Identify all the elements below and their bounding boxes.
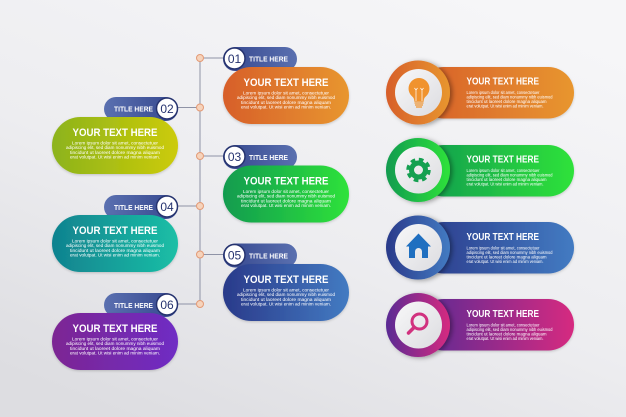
badge inner disc (395, 224, 442, 271)
bar (418, 67, 574, 118)
text pill 02: tincidunt ut laoreet dolore magna aliquam (70, 150, 160, 156)
text pill 03: tincidunt ut laoreet dolore magna aliquam (241, 198, 331, 204)
text pill 05: erat volutpat. Ut wisi enim ad minim veniam. (241, 302, 331, 308)
card text: tincidunt ut laoreet dolore magna aliquam (466, 177, 547, 183)
badge (386, 60, 450, 124)
icon: house (406, 234, 431, 258)
panel: step 02 (52, 97, 178, 174)
panel: home card (386, 216, 574, 280)
icon: gear (408, 160, 429, 180)
text pill 06: YOUR TEXT HERE (72, 323, 158, 335)
badge (386, 293, 450, 357)
text pill 01: tincidunt ut laoreet dolore magna aliquam (241, 100, 331, 106)
title tab 03: 03 (228, 150, 241, 164)
title tab 06 (104, 293, 178, 317)
title tab 06: TITLE HERE (114, 303, 153, 310)
badge (386, 216, 450, 280)
title tab 04: TITLE HERE (114, 205, 153, 212)
panel: step 01 (223, 47, 349, 124)
card text: YOUR TEXT HERE (466, 154, 539, 166)
text pill 01: erat volutpat. Ut wisi enim ad minim veniam. (241, 105, 331, 111)
text pill 06: tincidunt ut laoreet dolore magna aliquam (70, 346, 160, 352)
badge inner disc (395, 302, 442, 348)
text pill 05 (223, 264, 349, 321)
card text (466, 77, 553, 110)
text pill 01: Lorem ipsum dolor sit amet, consectetuer (243, 90, 329, 96)
bar (418, 299, 574, 350)
card text: erat volutpat. Ut wisi enim ad minim veniam. (466, 182, 544, 188)
title tab 06: 06 (160, 298, 174, 312)
card text: Lorem ipsum dolor sit amet, consectetuer (466, 246, 540, 252)
text pill 06: adipiscing elit, sed diam nonummy nibh euismod (66, 341, 164, 347)
card text: adipiscing elit, sed diam nonummy nibh euismod (466, 172, 553, 178)
bar (418, 145, 574, 196)
text pill 05: Lorem ipsum dolor sit amet, consectetuer (243, 288, 329, 294)
bar (418, 222, 574, 274)
text pill 02: Lorem ipsum dolor sit amet, consectetuer (72, 140, 158, 146)
text pill 01: YOUR TEXT HERE (244, 77, 328, 89)
text pill 04: erat volutpat. Ut wisi enim ad minim veniam. (70, 253, 160, 259)
card text (466, 309, 553, 342)
text pill 01: adipiscing elit, sed diam nonummy nibh euismod (237, 95, 335, 101)
title tab 01 (223, 47, 297, 71)
card text: tincidunt ut laoreet dolore magna aliquam (466, 332, 547, 338)
icon: magnifier (408, 314, 427, 333)
text pill 04: tincidunt ut laoreet dolore magna aliquam (70, 248, 160, 254)
title tab 04: 04 (160, 200, 174, 214)
text pill 02: adipiscing elit, sed diam nonummy nibh euismod (66, 145, 164, 151)
text pill 02 (52, 117, 178, 174)
text pill 04: adipiscing elit, sed diam nonummy nibh euismod (66, 243, 164, 249)
title tab 01: TITLE HERE (249, 56, 288, 64)
text pill 05: adipiscing elit, sed diam nonummy nibh euismod (237, 292, 335, 298)
icon: light bulb (409, 78, 429, 107)
card text: Lorem ipsum dolor sit amet, consectetuer (466, 168, 540, 174)
card text: adipiscing elit, sed diam nonummy nibh euismod (466, 250, 553, 256)
card text: erat volutpat. Ut wisi enim ad minim veniam. (466, 104, 544, 110)
badge (386, 138, 450, 202)
text pill 06: Lorem ipsum dolor sit amet, consectetuer (72, 336, 158, 342)
panel: step 03 (223, 145, 349, 222)
title tab 05: 05 (228, 248, 241, 262)
card text: erat volutpat. Ut wisi enim ad minim veniam. (466, 336, 544, 342)
card text: YOUR TEXT HERE (466, 309, 539, 320)
panel: gear card (386, 138, 574, 202)
title tab 04 (104, 195, 178, 219)
title tab 05 (223, 244, 297, 268)
panel: bulb card (386, 60, 574, 124)
text pill 03: YOUR TEXT HERE (244, 176, 328, 188)
timeline connector (176, 54, 224, 308)
card text: erat volutpat. Ut wisi enim ad minim veniam. (466, 259, 544, 265)
panel: step 06 (52, 293, 178, 370)
card text: Lorem ipsum dolor sit amet, consectetuer (466, 322, 540, 328)
text pill 04: Lorem ipsum dolor sit amet, consectetuer (72, 238, 158, 244)
text pill 02: erat volutpat. Ut wisi enim ad minim veniam. (70, 155, 160, 161)
panel: search card (386, 293, 574, 357)
title tab 02 (104, 97, 178, 121)
title tab 02: TITLE HERE (114, 106, 153, 114)
card text (466, 154, 553, 188)
text pill 03: Lorem ipsum dolor sit amet, consectetuer (243, 189, 329, 195)
text pill 04: YOUR TEXT HERE (72, 225, 158, 237)
text pill 06 (52, 313, 178, 370)
title tab 03: TITLE HERE (249, 155, 288, 162)
title tab 03 (223, 145, 297, 169)
panel: step 04 (52, 195, 178, 272)
text pill 03: erat volutpat. Ut wisi enim ad minim veniam. (241, 203, 331, 209)
badge inner disc (395, 69, 442, 116)
title tab 01: 01 (228, 52, 241, 66)
card text: tincidunt ut laoreet dolore magna aliquam (466, 254, 547, 260)
panel: step 05 (223, 244, 349, 321)
text pill 02: YOUR TEXT HERE (72, 127, 158, 139)
title tab 02: 02 (160, 102, 174, 116)
text pill 03: adipiscing elit, sed diam nonummy nibh euismod (237, 194, 335, 200)
text pill 06: erat volutpat. Ut wisi enim ad minim veniam. (70, 351, 160, 357)
card text: YOUR TEXT HERE (466, 77, 539, 88)
title tab 05: TITLE HERE (249, 254, 288, 260)
card text: YOUR TEXT HERE (466, 232, 539, 243)
text pill 04 (52, 215, 178, 272)
text pill 01 (223, 67, 349, 124)
card text: adipiscing elit, sed diam nonummy nibh euismod (466, 95, 553, 101)
text pill 03 (223, 166, 349, 222)
text pill 05: YOUR TEXT HERE (244, 274, 328, 286)
card text: adipiscing elit, sed diam nonummy nibh euismod (466, 327, 553, 333)
badge inner disc (395, 146, 442, 194)
card text: tincidunt ut laoreet dolore magna aliquam (466, 99, 547, 105)
card text (466, 232, 553, 265)
card text: Lorem ipsum dolor sit amet, consectetuer (466, 90, 540, 96)
text pill 05: tincidunt ut laoreet dolore magna aliquam (241, 297, 331, 303)
